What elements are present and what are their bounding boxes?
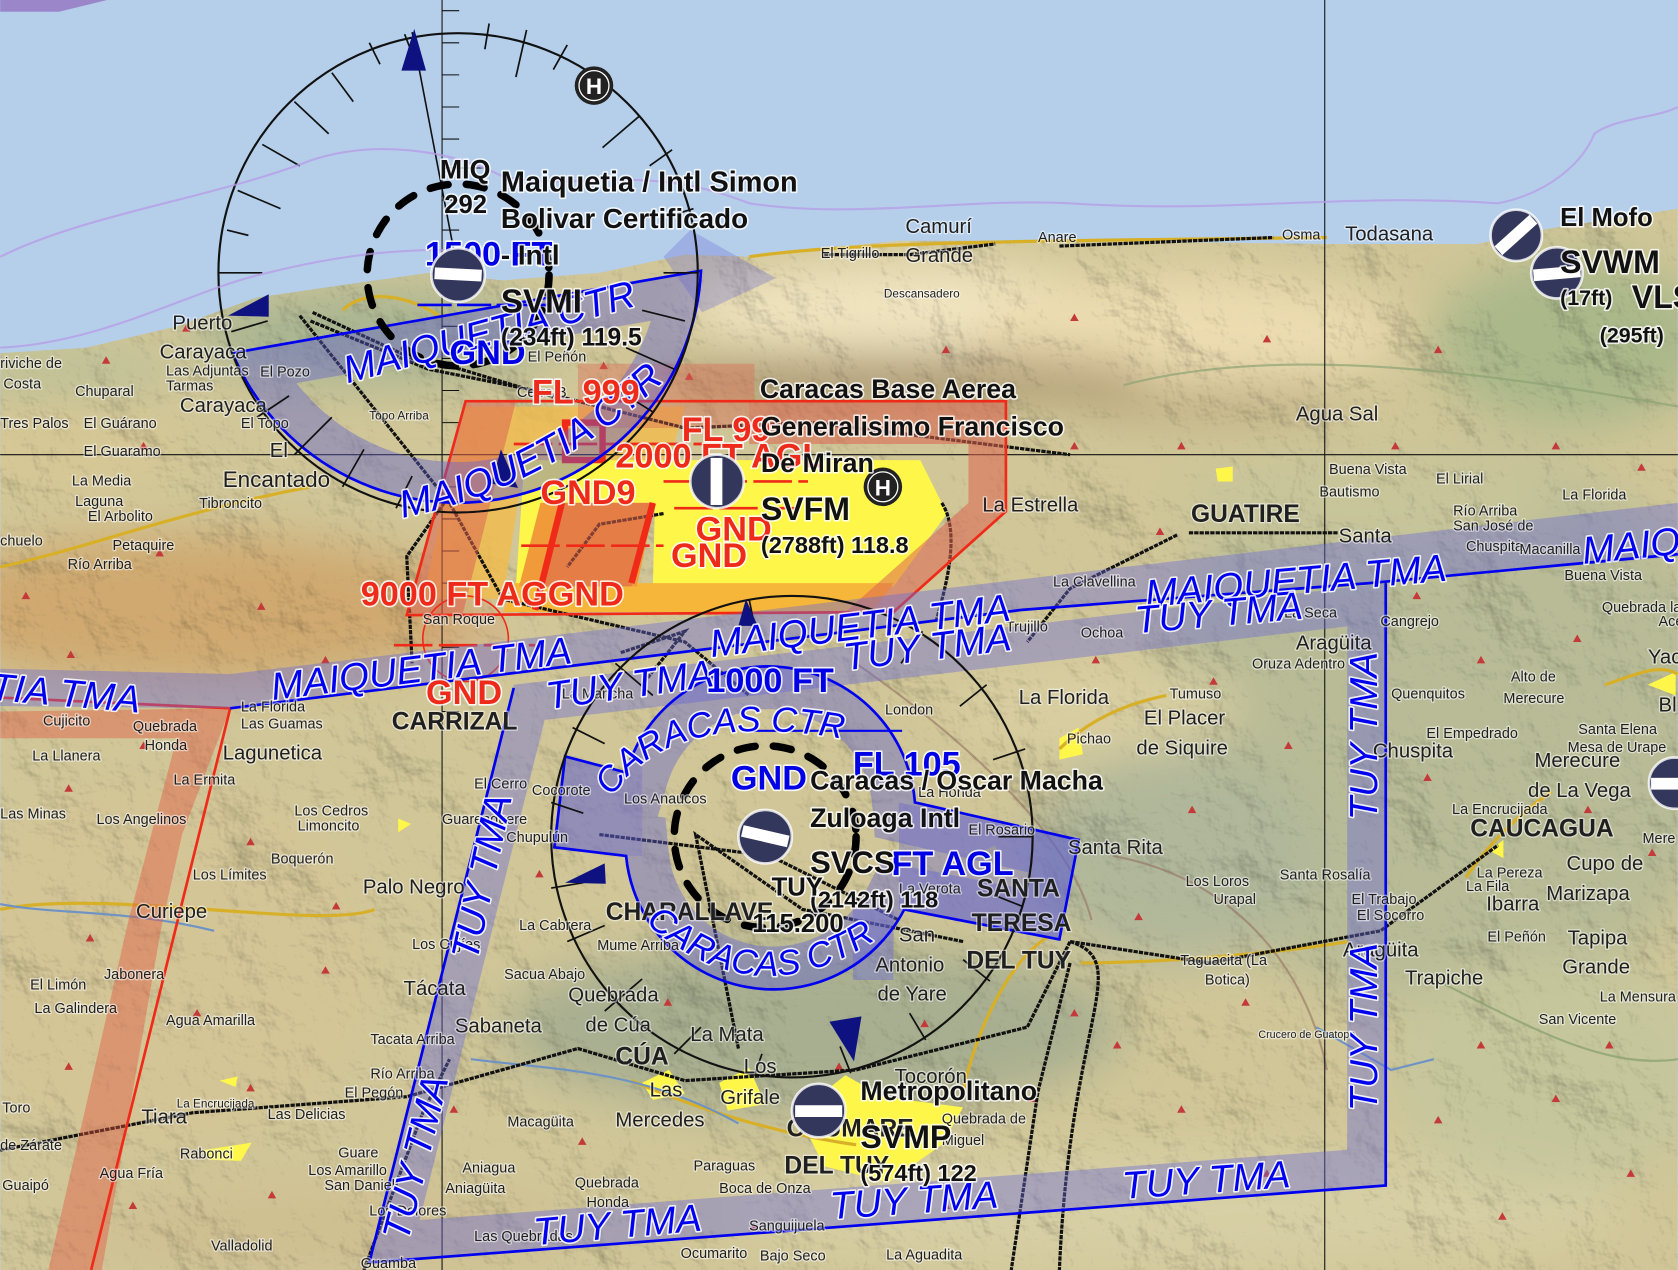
airport icon: El Mofo	[1491, 210, 1542, 261]
place labels: riviche de	[0, 356, 62, 372]
place labels: Bautismo	[1319, 484, 1380, 500]
airport labels: (17ft)	[1560, 286, 1612, 310]
airport labels: (234ft) 119.5	[501, 325, 642, 352]
place labels: Bajo Seco	[760, 1248, 826, 1264]
place labels: La Honda	[918, 785, 982, 801]
place labels: La Galindera	[34, 1001, 118, 1017]
town labels: Camurí	[905, 216, 972, 238]
blue airspace labels: MAIQUETIA CTR	[339, 273, 640, 392]
place labels: Tibroncito	[199, 496, 262, 512]
place labels: Los Dolores	[369, 1203, 446, 1219]
place labels: Miguel	[942, 1133, 984, 1149]
town labels: Santa	[1339, 525, 1392, 547]
place labels: La Encrucijada	[1452, 802, 1549, 818]
yellow roads	[0, 238, 1678, 1145]
place labels: Santa Rosalía	[1280, 867, 1371, 883]
place labels: Botica)	[1205, 972, 1250, 988]
town labels: Chuspita	[1373, 741, 1454, 763]
place labels: Guarenguere	[442, 812, 527, 828]
place labels: Aniagua	[462, 1161, 516, 1177]
place labels: Los Cedros	[294, 803, 368, 819]
red airspace labels: GND	[696, 510, 772, 548]
place labels: El Socorro	[1357, 908, 1424, 924]
Tuy dashed ring	[674, 746, 856, 928]
red circle zone	[423, 596, 508, 682]
airport labels: (2788ft) 118.8	[761, 532, 909, 558]
place labels: Paraguas	[693, 1158, 755, 1174]
place labels: El Empedrado	[1426, 726, 1518, 742]
airport labels: MIQ	[440, 155, 490, 185]
town labels: El Placer	[1144, 707, 1225, 729]
blue airspace labels: MAIQUETIA CTR	[401, 362, 664, 520]
town labels: Tiara	[141, 1106, 188, 1128]
airport labels: Zuloaga Intl	[810, 803, 960, 833]
place labels: Boquerón	[271, 851, 333, 867]
place labels: Los Límites	[193, 867, 267, 883]
region capitals: OCUMARE	[787, 1115, 914, 1142]
town labels: Quebrada	[568, 984, 659, 1006]
town labels: Ibarra	[1486, 894, 1540, 916]
place labels: Los Anaucos	[624, 792, 707, 808]
airport labels: SVCS	[810, 845, 895, 880]
blue airspace labels: TUY TMA	[375, 1071, 457, 1245]
airspace: red zones	[0, 364, 1006, 1270]
town labels: Marizapa	[1546, 883, 1630, 905]
airport labels: De Miran	[761, 448, 874, 478]
town labels: Sabaneta	[455, 1015, 543, 1037]
place labels: Topo Arriba	[369, 409, 429, 422]
place labels: Guaipó	[2, 1178, 49, 1194]
place labels: La Aguadita	[886, 1247, 963, 1263]
place labels: Limoncito	[298, 818, 359, 834]
town labels: Merecure	[1534, 750, 1620, 772]
place labels: La Fila	[1466, 879, 1510, 895]
place labels: Los Angelinos	[96, 812, 186, 828]
airspace: Caracas CTR	[554, 666, 1079, 989]
place labels: Cocorote	[532, 783, 591, 799]
blue airspace labels: GND	[450, 334, 526, 372]
place labels: Costa	[3, 376, 42, 392]
airspace corner band	[0, 0, 107, 12]
place labels: Quebrada de	[942, 1111, 1026, 1127]
inner red restricted area	[535, 423, 653, 610]
place labels: El Arbolito	[88, 509, 153, 525]
town labels: Antonio	[875, 954, 944, 976]
red airspace labels: FL 999	[532, 373, 640, 411]
airport icon: east edge	[1649, 758, 1678, 809]
place labels: Tumuso	[1170, 687, 1221, 703]
place labels: Anare	[1038, 230, 1077, 246]
town labels: Tocorón	[895, 1066, 967, 1088]
place labels: El Pegón	[345, 1086, 403, 1102]
town labels: Bl	[1659, 694, 1677, 716]
place labels: Trujillo	[1006, 619, 1048, 635]
red airspace labels: 2000 FT AGL	[615, 438, 823, 476]
place labels: La Verota	[899, 881, 962, 897]
compass rose: Maiquetia VOR	[218, 24, 698, 512]
compass triangles	[228, 294, 269, 317]
railways and power lines	[0, 238, 1498, 1270]
region capitals: CHARALLAVE	[606, 899, 773, 926]
airport icon: SVMP	[792, 1084, 845, 1137]
red airspace labels: GND	[671, 537, 747, 575]
place labels: El Lirial	[1436, 472, 1483, 488]
blue airspace labels: TUY TMA	[1343, 652, 1386, 820]
blue airspace labels: TUY TMA	[1121, 1153, 1292, 1208]
airport labels: SVMP	[860, 1119, 951, 1155]
town labels: Cupo de	[1567, 853, 1643, 875]
place labels: Crucero de Guatopo	[1258, 1029, 1355, 1041]
place labels: Jabonera	[104, 967, 165, 983]
blue airspace labels: TUY TMA	[829, 1174, 1000, 1228]
red airspace labels: GND9	[540, 474, 636, 512]
airport labels: Caracas / Oscar Macha	[810, 766, 1104, 796]
place labels: Agua Fría	[100, 1166, 164, 1182]
airport icon: SVWM	[1531, 247, 1583, 299]
place labels: La Clavellina	[1053, 574, 1137, 590]
place labels: La Ermita	[174, 772, 236, 788]
red airspace labels: 9000 FT AGGND	[361, 576, 624, 614]
blue airspace labels: TUY TMA	[1133, 585, 1304, 642]
peak markers	[22, 313, 1656, 1230]
place labels: Chuparal	[75, 384, 134, 400]
town labels: Palo Negro	[363, 876, 465, 898]
airport labels: Bolivar Certificado	[501, 203, 748, 234]
town labels: Grande	[1562, 957, 1630, 979]
place labels: San Roque	[423, 612, 495, 628]
airport icon: SVFM	[690, 455, 744, 508]
red zone outline	[407, 401, 1006, 615]
place labels: El Rosario	[968, 823, 1035, 839]
place labels: El Guaramo	[84, 444, 161, 460]
place labels: Las Minas	[0, 806, 66, 822]
city areas	[203, 407, 1676, 1182]
place labels: Aniagüita	[445, 1181, 506, 1197]
heliport icon north	[575, 66, 613, 105]
town labels: de Siquire	[1136, 737, 1228, 759]
blue airspace labels: TUY TMA	[841, 616, 1013, 679]
place labels: Río Arriba	[68, 557, 133, 573]
place labels: Merecure	[1503, 691, 1564, 707]
place labels: Chuspita	[1466, 539, 1524, 555]
compass needle	[412, 32, 458, 273]
blue airspace labels: MAIQUETIA TMA	[269, 629, 574, 709]
town labels: Grande	[905, 245, 973, 267]
place labels: Osma	[1282, 228, 1321, 244]
town labels: Mercedes	[615, 1110, 705, 1132]
place labels: Sacua Abajo	[504, 967, 585, 983]
town labels: Tapipa	[1568, 928, 1628, 950]
place labels: Buena Vista	[1329, 462, 1408, 478]
place labels: Sanguijuela	[749, 1218, 826, 1234]
region capitals: GUATIRE	[1191, 501, 1300, 528]
place labels: La Encrucijada	[177, 1097, 255, 1110]
town labels: Puerto	[172, 313, 232, 335]
town labels: Encantado	[223, 467, 330, 492]
place labels: Mesa de Urape	[1568, 740, 1666, 756]
blue airspace labels: TUY TMA	[444, 790, 521, 964]
red zone bands	[407, 364, 1006, 615]
place labels: El Limón	[30, 978, 86, 994]
heliport icon Caracas: H	[875, 475, 891, 500]
region capitals: CAUCAGUA	[1470, 816, 1614, 843]
place labels: La Cabrera	[519, 918, 592, 934]
town labels: Carayaca	[180, 395, 268, 417]
place labels: La Mensura	[1600, 989, 1677, 1005]
region capitals: CÚA	[615, 1043, 669, 1071]
place labels: London	[885, 703, 933, 719]
red airspace labels: FL 99	[682, 411, 770, 449]
place labels: Agua Amarilla	[166, 1013, 256, 1029]
airport icon: SVCS	[738, 810, 792, 863]
place labels: San Daniel	[324, 1178, 395, 1194]
place labels: chuelo	[0, 534, 43, 550]
place labels: Petaquire	[113, 538, 174, 554]
place labels: Laguna	[75, 494, 124, 510]
place labels: Macagüita	[507, 1115, 575, 1131]
place labels: Ochoa	[1081, 626, 1124, 642]
place labels: San Vicente	[1539, 1012, 1616, 1028]
town labels: Aragüita	[1343, 940, 1419, 962]
place labels: El Topo	[241, 416, 289, 432]
airport labels: Generalisimo Francisco	[761, 411, 1064, 441]
place labels: Las Guamas	[241, 717, 323, 733]
place labels: Alto de	[1511, 670, 1556, 686]
Tuy triangles	[829, 1016, 861, 1061]
town labels: San	[899, 925, 935, 947]
place labels: Río Arriba	[370, 1066, 436, 1082]
town labels	[136, 216, 1678, 1132]
blue airspace labels: CARACAS CTR	[648, 908, 875, 978]
airport labels: El Mofo	[1560, 204, 1653, 232]
town labels: Tácata	[404, 978, 466, 1000]
place labels: Chupulún	[506, 830, 568, 846]
town labels: Agua Sal	[1296, 403, 1378, 425]
place labels: Pichao	[1067, 732, 1111, 748]
airport labels: Maiquetia / Intl Simon	[501, 167, 798, 199]
airport icon: SVMI	[431, 248, 485, 302]
compass rose: Tuy VOR	[551, 596, 1033, 1077]
airport labels: TUY	[772, 874, 823, 902]
airport labels: (295ft)	[1600, 323, 1664, 347]
town labels: Santa Rita	[1068, 837, 1164, 859]
blue airspace labels: MAIQUETIA TMA	[707, 587, 1013, 666]
blue airspace labels: GND	[731, 760, 807, 798]
town labels: Carayaca	[160, 341, 247, 363]
place labels: Los Amarillo	[308, 1163, 387, 1179]
heliport icon north: H	[586, 74, 602, 99]
place labels: Santa Elena	[1578, 722, 1658, 738]
blue airspace labels: MAIQUETIA TMA	[1143, 547, 1448, 616]
blue airspace labels: 1000 FT	[706, 662, 834, 700]
blue airspace labels: TUY TMA	[532, 1197, 703, 1254]
place labels: Boca de Onza	[719, 1181, 812, 1197]
place labels: Los Loros	[1186, 874, 1249, 890]
region capitals: TERESA	[972, 910, 1072, 937]
airport labels: 115.200	[752, 910, 844, 938]
blue airspace labels: TUY TMA	[543, 652, 716, 718]
place labels: Tacata Arriba	[370, 1032, 456, 1048]
town labels: Los	[744, 1056, 777, 1078]
place labels: El Peñón	[1487, 930, 1546, 946]
place labels: Quebrada	[575, 1176, 640, 1192]
airport labels	[440, 155, 1678, 1186]
place labels: Río Arriba	[1453, 504, 1518, 520]
place labels: Rabonci	[180, 1147, 233, 1163]
inner dashed ring	[367, 184, 549, 366]
town labels: Grifale	[720, 1087, 780, 1109]
place labels: Cangrejo	[1380, 614, 1439, 630]
town labels: Trapiche	[1405, 967, 1483, 989]
place labels: El Pozo	[260, 365, 310, 381]
red airspace labels	[361, 373, 823, 712]
place labels: Los Cujíes	[412, 937, 480, 953]
red west zone	[0, 708, 230, 1270]
place labels: Ocumarito	[681, 1246, 747, 1262]
place labels: La Florida	[1562, 488, 1627, 504]
region capitals: DEL TUY	[784, 1153, 889, 1180]
airport labels: Metropolitano	[860, 1076, 1037, 1106]
airport labels: Caracas Base Aerea	[760, 374, 1017, 404]
place labels: Cujicito	[43, 713, 90, 729]
airport labels: (2142ft) 118	[810, 886, 938, 912]
town labels: de Cúa	[585, 1014, 652, 1036]
town labels: La Florida	[1019, 687, 1110, 709]
place labels: El Guárano	[84, 416, 157, 432]
place labels: La Pereza	[1477, 865, 1543, 881]
place labels: La Media	[72, 474, 132, 490]
heliport icon Caracas	[864, 468, 902, 506]
place labels: Valladolid	[211, 1239, 273, 1255]
place labels: Las Quebradas	[474, 1229, 573, 1245]
place labels: Quenquitos	[1391, 687, 1465, 703]
blue airspace labels: TUY TMA	[1343, 943, 1386, 1111]
place labels: El Cerro	[474, 777, 527, 793]
airport labels: (574ft) 122	[860, 1160, 977, 1186]
airport labels: SVMI	[501, 283, 582, 320]
airport labels: SVFM	[761, 491, 850, 527]
place labels: Tarmas	[166, 379, 213, 395]
place labels: La Seca	[1284, 605, 1338, 621]
place labels: Buena Vista	[1564, 568, 1643, 584]
place labels: Las Delicias	[268, 1107, 346, 1123]
place labels: Toro	[2, 1101, 30, 1117]
airspace: Maiquetia CTR	[232, 230, 776, 503]
place labels: Macanilla	[1519, 542, 1581, 558]
region capitals	[392, 501, 1614, 1180]
airport labels: 292	[444, 191, 487, 219]
place labels: Taguacita (La	[1180, 953, 1268, 969]
town labels: La Estrella	[982, 494, 1079, 516]
town labels: La Mata	[690, 1024, 764, 1046]
region capitals: CARRIZAL	[392, 709, 517, 736]
place labels: de Zárate	[0, 1138, 62, 1154]
blue airspace labels: FL 105	[853, 746, 961, 784]
place labels: Urapal	[1213, 892, 1256, 908]
place labels: Descansadero	[884, 287, 960, 300]
place labels: Mume Arriba	[597, 938, 680, 954]
place labels: Cerro B	[517, 385, 567, 401]
blue airspace labels: 1500 FT	[425, 235, 552, 273]
red airspace labels: GND	[426, 674, 502, 712]
place labels: Honda	[586, 1195, 630, 1211]
airport labels: SVWM	[1560, 244, 1660, 280]
place labels: Guare	[338, 1146, 378, 1162]
place labels: Las Adjuntas	[166, 364, 249, 380]
FIR boundary lines	[0, 107, 1678, 348]
town labels: de Yare	[878, 983, 947, 1005]
town labels: El	[270, 440, 288, 462]
town labels: Todasana	[1345, 224, 1434, 246]
place labels: El Trabajo	[1351, 892, 1417, 908]
town labels: Lagunetica	[223, 743, 323, 765]
town labels: de La Vega	[1528, 780, 1632, 802]
town labels: Aragüita	[1296, 632, 1372, 654]
place labels: El Tigrillo	[821, 246, 879, 262]
place labels: San José de	[1453, 519, 1533, 535]
place labels: Mere	[1643, 831, 1675, 847]
town labels: Curiepe	[136, 901, 207, 923]
blue airspace labels: CARACAS CTR	[597, 704, 846, 794]
place labels: El Peñón	[528, 350, 586, 366]
airport labels: - Intl	[501, 239, 560, 270]
place labels: Quebrada	[133, 719, 198, 735]
place labels: Honda	[145, 738, 188, 754]
region capitals: DEL TUY	[966, 947, 1071, 974]
town labels: Las	[650, 1080, 682, 1102]
blue airspace labels: FT AGL	[891, 845, 1014, 883]
region capitals: SANTA	[977, 876, 1060, 903]
place labels: Oruza Adentro	[1252, 657, 1345, 673]
green and river lines	[0, 365, 1678, 1123]
place labels: La Llanera	[32, 749, 101, 765]
place labels: La Florida	[241, 699, 306, 715]
airspace: Maiquetia and Tuy TMA	[0, 503, 1678, 1263]
place labels: Tres Palos	[0, 416, 69, 432]
place labels: La Mancha	[562, 687, 634, 703]
